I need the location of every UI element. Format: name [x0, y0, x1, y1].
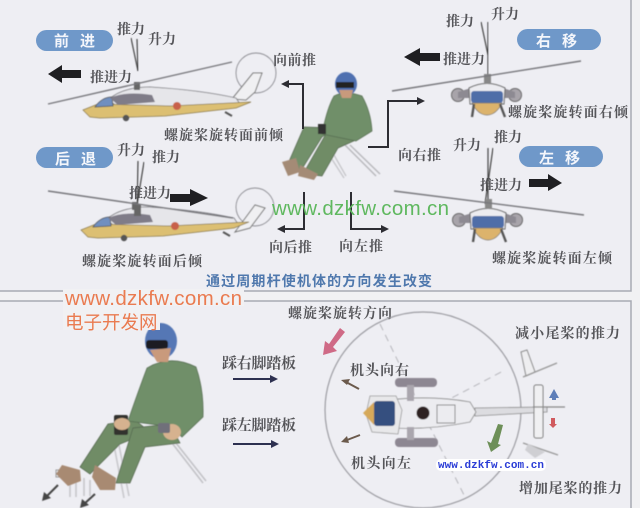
pedal labels and arrows: 踩左脚踏板: [222, 416, 296, 434]
control labels: 向后推: [269, 239, 312, 256]
label pill: backward: 退: [81, 151, 96, 168]
force labels: left: [453, 129, 522, 194]
watermark orange: www.dzkfw.com.cn: [64, 287, 242, 310]
control labels: [269, 52, 441, 256]
force labels: backward: [117, 142, 180, 202]
arrow: backward motion: [170, 189, 208, 206]
tail thrust labels: [515, 325, 622, 497]
arrow: rotation pink: [323, 328, 345, 355]
arrow: nose right: [341, 379, 359, 389]
watermark green: www.dzkfw.com.cn: [271, 197, 449, 220]
force labels: backward: 推力: [152, 149, 180, 166]
pedal labels and arrows: [222, 354, 296, 448]
pedal labels and arrows: 踩右脚踏板: [222, 354, 296, 372]
force labels: right: 推进力: [443, 51, 485, 68]
force labels: left: 推进力: [480, 177, 522, 194]
force labels: forward: 推进力: [90, 69, 132, 86]
force vectors: right: [481, 22, 488, 80]
left shift group: [394, 129, 613, 267]
label pill: right: [517, 29, 601, 50]
arrow: tail thrust up: [549, 389, 559, 400]
label pill: left: 左: [539, 150, 554, 167]
helicopter: backward tilt: [48, 188, 274, 241]
rotor rotation title: 螺旋桨旋转方向: [288, 305, 392, 322]
nose direction labels: [350, 362, 411, 472]
control arrow: push left: [351, 192, 389, 233]
control arrow: push forward: [281, 80, 303, 129]
pilot with cyclic stick: [282, 72, 380, 180]
right shift group: [392, 6, 629, 121]
force labels: right: 推力: [446, 13, 474, 30]
label pill: left: [519, 146, 603, 167]
label pill: right: 移: [562, 33, 577, 50]
control labels: 向右推: [398, 147, 441, 164]
caption: forward tilt: 螺旋桨旋转面前倾: [164, 127, 284, 144]
arrow: nose left: [341, 435, 360, 443]
watermark orange: 电子开发网: [65, 312, 158, 333]
force labels: right: [443, 6, 519, 68]
label pill: backward: 后: [55, 151, 70, 168]
force labels: forward: [90, 21, 176, 86]
panel: pedal control: [0, 301, 631, 508]
caption: left tilt: 螺旋桨旋转面左倾: [492, 250, 613, 267]
nose direction labels: 机头向右: [350, 362, 409, 379]
arrow: rotation green: [487, 424, 503, 452]
watermark orange: [63, 287, 244, 333]
label pill: left: 移: [565, 150, 580, 167]
rotor disc: [325, 312, 521, 508]
control labels: 向左推: [339, 238, 383, 255]
helicopter top view: [363, 350, 565, 458]
arrow: right-shift thrust: [404, 48, 440, 66]
forward flight group: [36, 21, 284, 144]
helicopter: right tilt: [392, 61, 581, 117]
force vectors: backward: [137, 161, 144, 205]
force labels: backward: 推进力: [129, 185, 171, 202]
backward flight group: [36, 142, 274, 270]
arrow: forward motion: [48, 65, 81, 83]
control arrow: push right: [368, 97, 425, 147]
tail thrust labels: 增加尾桨的推力: [519, 480, 622, 497]
force vectors: left: [485, 148, 493, 204]
panel: cyclic stick control: [0, 0, 631, 291]
arrow: left-shift thrust: [529, 174, 562, 191]
tail thrust labels: 减小尾桨的推力: [515, 325, 620, 342]
label pill: forward: [36, 30, 113, 51]
label pill: forward: 前: [54, 32, 69, 50]
helicopter: forward tilt: [48, 53, 276, 121]
label pill: backward: [36, 147, 113, 168]
caption: backward tilt: 螺旋桨旋转面后倾: [82, 253, 203, 270]
force vectors: forward: [131, 38, 138, 71]
watermark blue: www.dzkfw.com.cn: [438, 460, 544, 472]
force labels: forward: 升力: [148, 31, 176, 48]
control arrow: push back: [277, 192, 304, 233]
control labels: 向前推: [273, 52, 316, 69]
force labels: forward: 推力: [117, 21, 145, 38]
helicopter: left tilt: [394, 191, 584, 242]
arrow: tail thrust down: [549, 418, 557, 428]
force labels: left: 升力: [453, 137, 481, 154]
force labels: left: 推力: [494, 129, 522, 146]
force labels: right: 升力: [491, 6, 519, 23]
caption: right tilt: 螺旋桨旋转面右倾: [508, 104, 629, 121]
pilot with pedals: [42, 323, 206, 508]
force labels: backward: 升力: [117, 142, 145, 159]
label pill: forward: 进: [80, 33, 95, 50]
label pill: right: 右: [536, 33, 551, 50]
nose direction labels: 机头向左: [351, 455, 411, 472]
panel caption: 通过周期杆使机体的方向发生改变: [206, 273, 432, 289]
